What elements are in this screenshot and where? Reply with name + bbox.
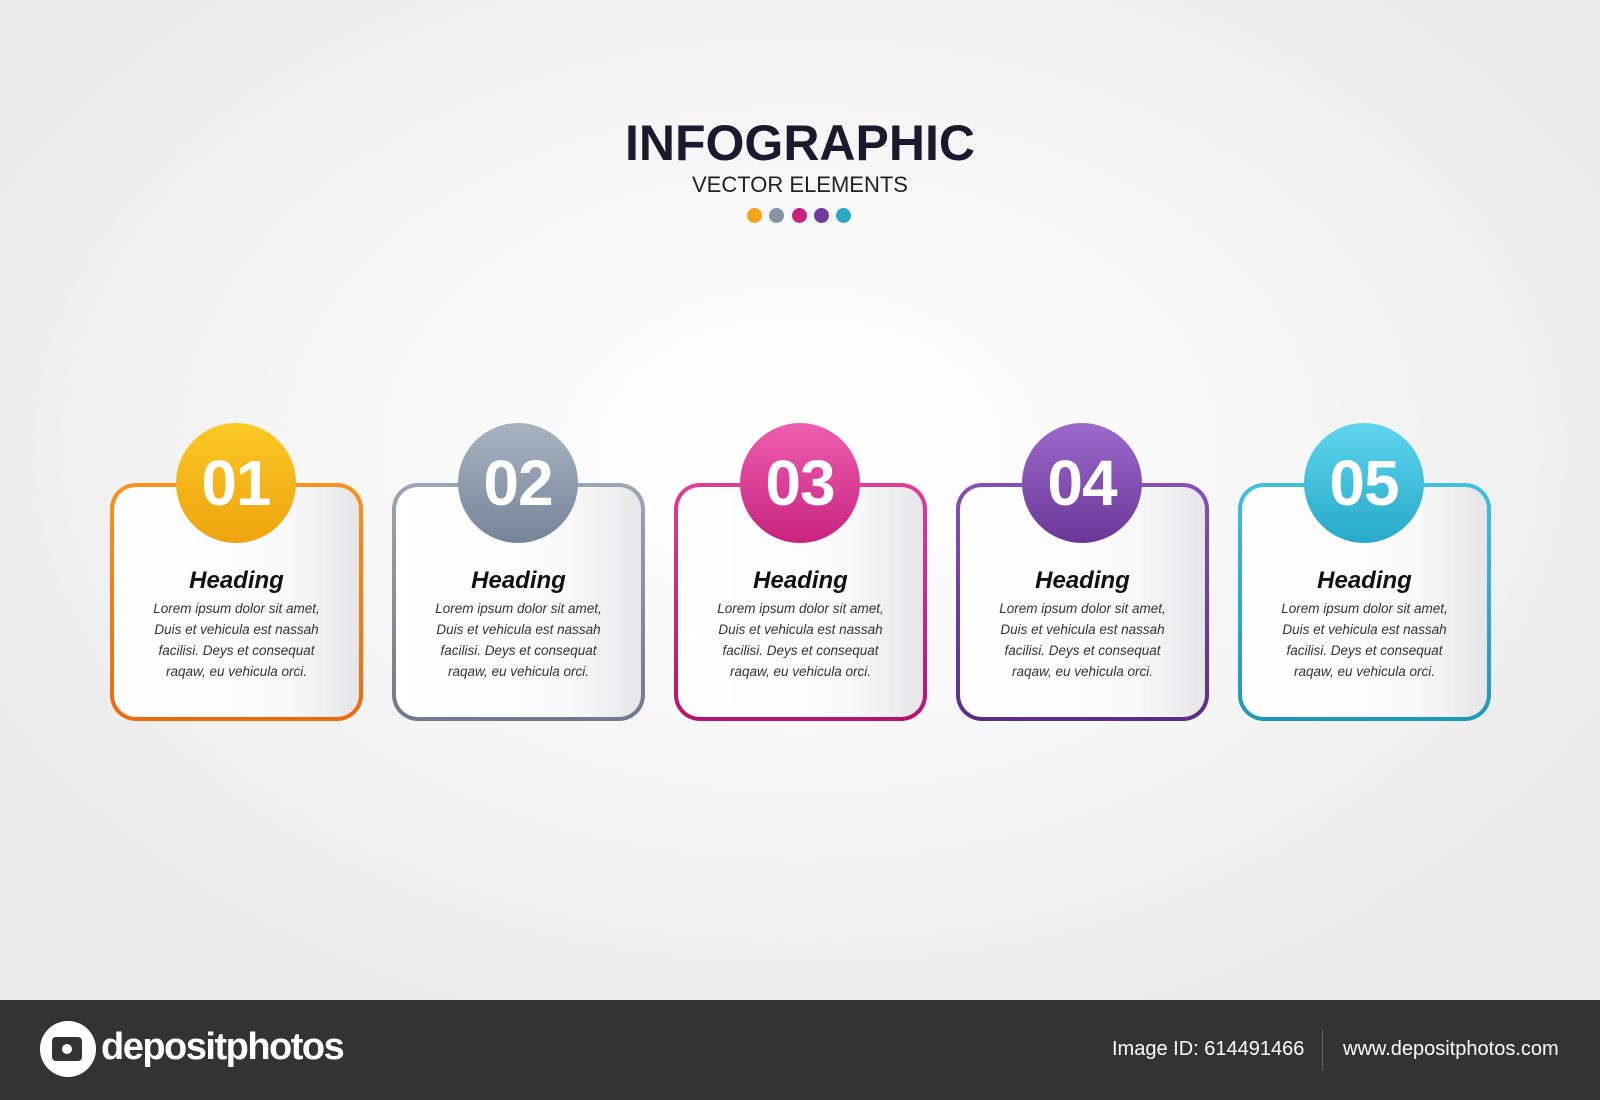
- text 01: facilisi. Deys et consequat: [158, 643, 315, 658]
- footer bar: [0, 1000, 1600, 1100]
- logo text: depositphotos: [101, 1026, 343, 1068]
- panel: step 05: [1238, 483, 1491, 721]
- text 02: raqaw, eu vehicula orci.: [448, 664, 589, 679]
- image id: Image ID: 614491466: [1112, 1038, 1304, 1060]
- text 03: Duis et vehicula est nassah: [718, 622, 883, 637]
- badge 01: [176, 423, 296, 543]
- text 03: facilisi. Deys et consequat: [722, 643, 879, 658]
- heading 02: Heading: [471, 567, 566, 594]
- panel: step 04: [956, 483, 1209, 721]
- text 02: Duis et vehicula est nassah: [436, 622, 601, 637]
- text 01: raqaw, eu vehicula orci.: [166, 664, 307, 679]
- badge 04: [1022, 423, 1142, 543]
- text 04: facilisi. Deys et consequat: [1004, 643, 1161, 658]
- text 04: raqaw, eu vehicula orci.: [1012, 664, 1153, 679]
- title: INFOGRAPHIC: [625, 115, 975, 171]
- text 04: [999, 601, 1166, 679]
- color dots: [747, 208, 851, 223]
- icon: camera logo: [40, 1021, 96, 1077]
- text 05: Lorem ipsum dolor sit amet,: [1281, 601, 1448, 616]
- badge 01: 01: [201, 447, 271, 519]
- website url: www.depositphotos.com: [1343, 1038, 1559, 1060]
- text 03: raqaw, eu vehicula orci.: [730, 664, 871, 679]
- heading 01: Heading: [189, 567, 284, 594]
- subtitle: VECTOR ELEMENTS: [692, 172, 908, 197]
- text 02: [435, 601, 602, 679]
- text 04: Lorem ipsum dolor sit amet,: [999, 601, 1166, 616]
- text 05: Duis et vehicula est nassah: [1282, 622, 1447, 637]
- text 01: Duis et vehicula est nassah: [154, 622, 319, 637]
- text 05: [1281, 601, 1448, 679]
- badge 03: 03: [765, 447, 835, 519]
- text 03: [717, 601, 884, 679]
- text 05: facilisi. Deys et consequat: [1286, 643, 1443, 658]
- panel: step 02: [392, 483, 645, 721]
- badge 02: [458, 423, 578, 543]
- text 03: Lorem ipsum dolor sit amet,: [717, 601, 884, 616]
- heading 04: Heading: [1035, 567, 1130, 594]
- badge 04: 04: [1047, 447, 1117, 519]
- heading 03: Heading: [753, 567, 848, 594]
- text 01: Lorem ipsum dolor sit amet,: [153, 601, 320, 616]
- text 02: facilisi. Deys et consequat: [440, 643, 597, 658]
- badge 03: [740, 423, 860, 543]
- panel: step 03: [674, 483, 927, 721]
- text 04: Duis et vehicula est nassah: [1000, 622, 1165, 637]
- text 02: Lorem ipsum dolor sit amet,: [435, 601, 602, 616]
- text 01: [153, 601, 320, 679]
- badge 05: [1304, 423, 1424, 543]
- badge 05: 05: [1329, 447, 1399, 519]
- panel: step 01: [110, 483, 363, 721]
- text 05: raqaw, eu vehicula orci.: [1294, 664, 1435, 679]
- badge 02: 02: [483, 447, 553, 519]
- heading 05: Heading: [1317, 567, 1412, 594]
